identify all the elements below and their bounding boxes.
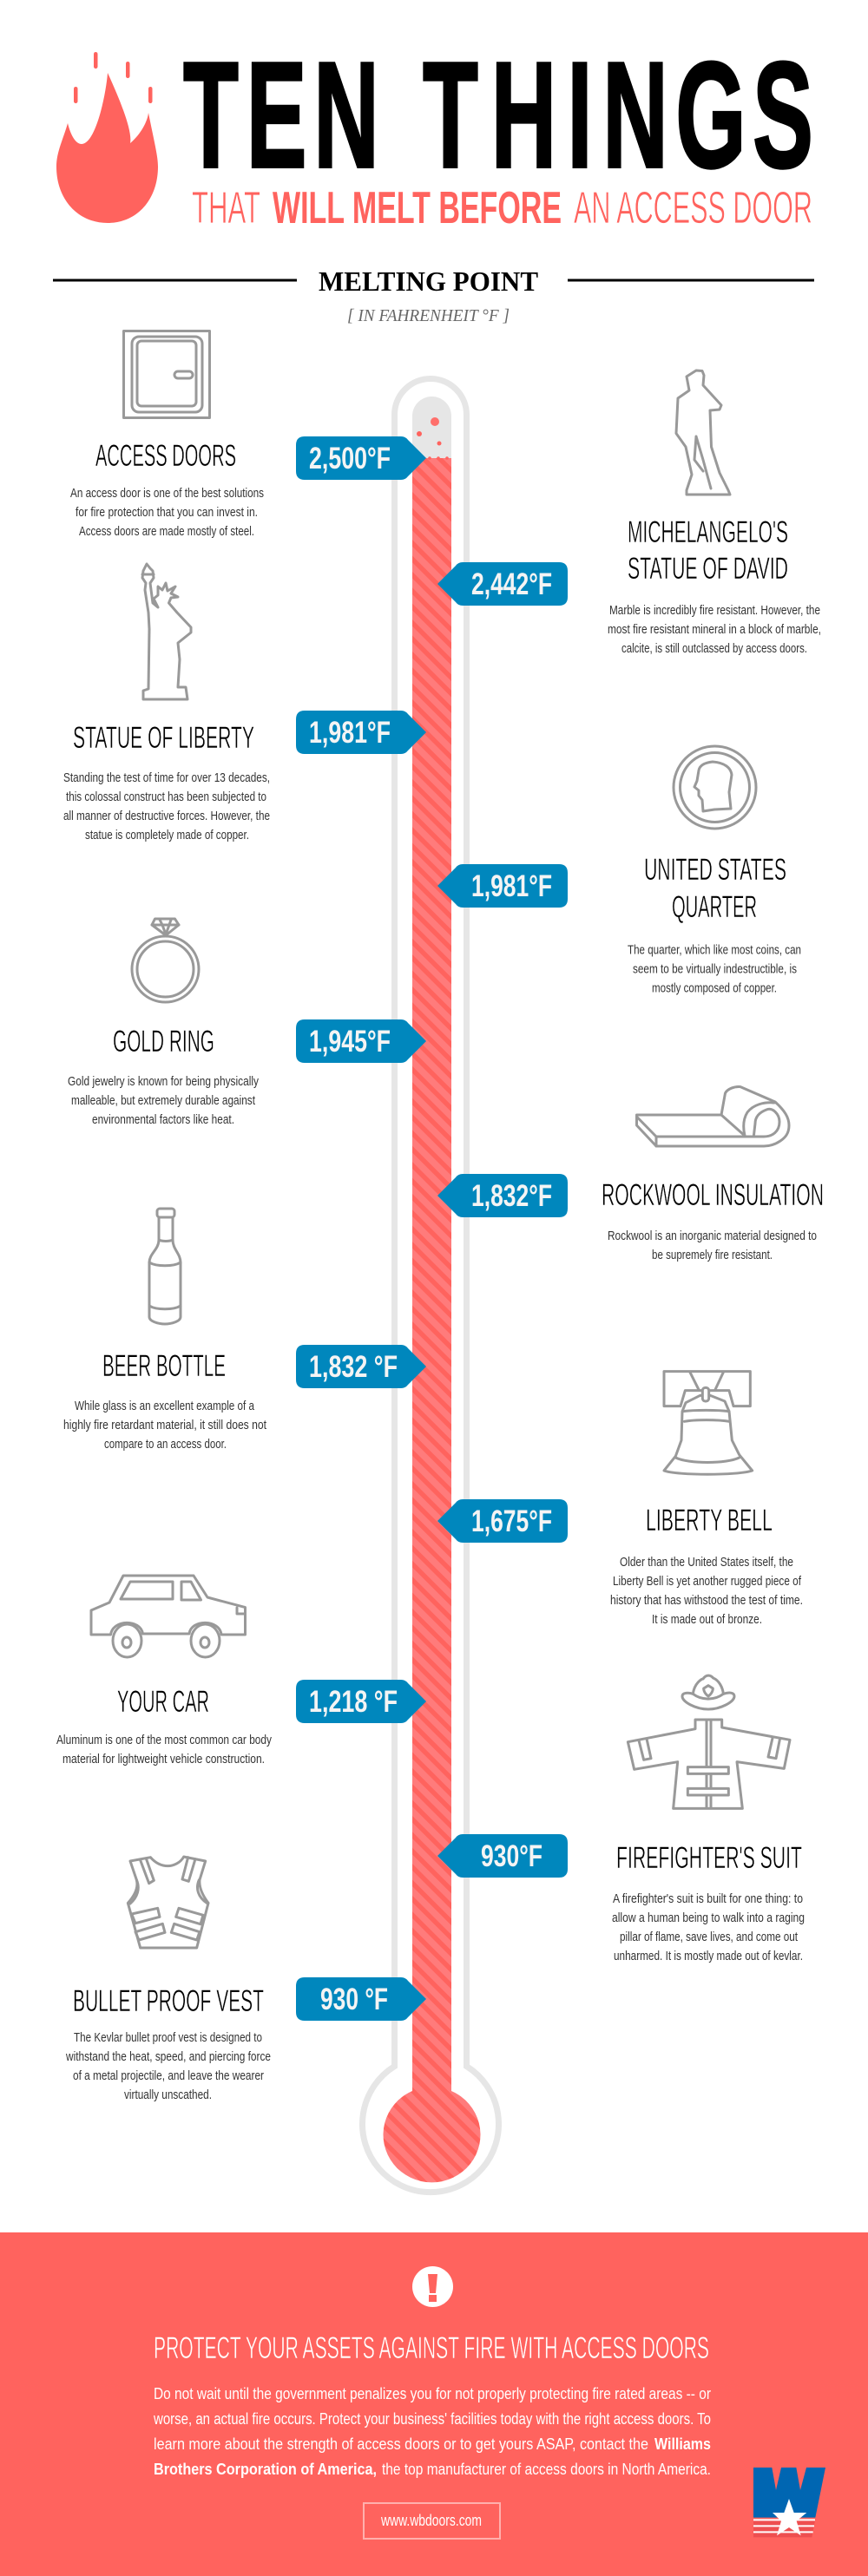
description: Gold jewelry is known for being physically — [68, 1074, 259, 1089]
heading: LIBERTY BELL — [646, 1504, 773, 1537]
description: be supremely fire resistant. — [652, 1248, 773, 1262]
description: highly fire retardant material, it still does not — [63, 1418, 267, 1432]
description — [70, 486, 264, 539]
description: allow a human being to walk into a raging — [612, 1911, 805, 1925]
description: Aluminum is one of the most common car body — [56, 1733, 272, 1747]
description: all manner of destructive forces. However, the — [63, 809, 270, 823]
button: website — [364, 2503, 500, 2539]
panel: united states quarter — [628, 746, 801, 996]
tag: 930 °F left: 930 °F — [320, 1983, 388, 2016]
icon: bottle — [149, 1209, 181, 1324]
tag: 1,218 °F: 1,218 °F — [309, 1685, 398, 1719]
description: compare to an access door. — [104, 1437, 227, 1452]
icon: door — [123, 331, 210, 418]
icon: ring — [132, 919, 199, 1002]
description: Older than the United States itself, the — [620, 1555, 793, 1570]
panel: rockwool insulation — [602, 1087, 824, 1262]
description: Liberty Bell is yet another rugged piece of — [613, 1574, 802, 1589]
description — [608, 603, 821, 656]
tag: 1,218 °F — [296, 1680, 426, 1723]
subtitle: WILL MELT BEFORE — [273, 183, 562, 233]
tag: 2,500°F: 2,500°F — [309, 442, 391, 475]
heading: QUARTER — [672, 890, 757, 924]
footer text — [153, 2385, 711, 2478]
icon: rockwool roll — [637, 1087, 789, 1146]
footer text: Do not wait until the government penalizes you for not properly protecting fire rated areas -- or — [154, 2385, 711, 2402]
description: An access door is one of the best solutions — [70, 486, 264, 501]
section heading: melting point — [53, 265, 814, 325]
heading: BULLET PROOF VEST — [73, 1984, 264, 2018]
icon: bell — [664, 1372, 753, 1474]
icon: quarter — [674, 746, 756, 829]
panel: gold ring — [68, 919, 259, 1127]
description: of a metal projectile, and leave the wearer — [73, 2068, 264, 2083]
thermometer — [363, 378, 499, 2193]
panel: bullet proof vest — [65, 1857, 271, 2102]
tag: 1,981°F left — [296, 711, 426, 754]
description — [612, 1891, 805, 1963]
tag: 1,981°F right — [437, 864, 568, 908]
description: calcite, is still outclassed by access doors. — [621, 641, 807, 656]
subtitle: THAT — [192, 183, 260, 233]
tag: 1,981°F left: 1,981°F — [309, 716, 391, 750]
footer text: learn more about the strength of access doors or to get yours ASAP, contact the — [154, 2435, 648, 2453]
tag: 2,442°F — [437, 562, 568, 606]
heading — [628, 515, 788, 586]
tag: 2,500°F — [296, 436, 426, 480]
section heading: melting point: [ IN FAHRENHEIT °F ] — [347, 306, 510, 325]
description: malleable, but extremely durable against — [71, 1093, 256, 1108]
description: Standing the test of time for over 13 decades, — [63, 770, 270, 785]
panel: beer bottle — [63, 1209, 267, 1452]
description: Rockwool is an inorganic material designed to — [608, 1229, 817, 1243]
tag: 930°F right — [437, 1834, 568, 1878]
description: It is made out of bronze. — [652, 1612, 762, 1627]
logo: williams brothers — [753, 2468, 825, 2537]
description: mostly composed of copper. — [652, 980, 777, 996]
footer text: the top manufacturer of access doors in North America. — [382, 2461, 711, 2478]
tag: 1,675°F — [437, 1499, 568, 1543]
description: Access doors are made mostly of steel. — [79, 524, 254, 539]
footer text: worse, an actual fire occurs. Protect your business' facilities today with the right access doors. To — [153, 2410, 711, 2428]
tag: 930 °F left — [296, 1977, 426, 2021]
footer text: Williams — [654, 2435, 711, 2453]
panel: statue of david — [608, 370, 821, 656]
heading: YOUR CAR — [117, 1685, 209, 1719]
description: unharmed. It is mostly made out of kevlar. — [614, 1949, 803, 1963]
description: for fire protection that you can invest in. — [76, 505, 258, 520]
description — [68, 1074, 259, 1127]
description: The Kevlar bullet proof vest is designed to — [74, 2030, 262, 2045]
tag: 1,945°F — [296, 1019, 426, 1063]
description: While glass is an excellent example of a — [75, 1399, 255, 1413]
tag: 2,442°F: 2,442°F — [471, 567, 552, 601]
button: website: www.wbdoors.com — [380, 2512, 482, 2529]
description: withstand the heat, speed, and piercing force — [65, 2049, 271, 2064]
description: pillar of flame, save lives, and come out — [620, 1930, 799, 1944]
panel: footer call to action — [0, 2232, 868, 2576]
icon: car — [91, 1576, 245, 1657]
description: seem to be virtually indestructible, is — [633, 961, 797, 977]
description — [608, 1229, 817, 1262]
tag: 1,832°F right — [437, 1174, 568, 1217]
icon: firefighter helmet and jacket — [628, 1675, 790, 1808]
tag: 930°F right: 930°F — [481, 1839, 542, 1873]
tag: 1,832°F right: 1,832°F — [471, 1179, 552, 1213]
heading: GOLD RING — [113, 1025, 214, 1059]
description — [610, 1555, 803, 1627]
tag: 1,945°F: 1,945°F — [309, 1025, 391, 1059]
heading: BEER BOTTLE — [102, 1349, 226, 1383]
description: A firefighter's suit is built for one thing: to — [613, 1891, 803, 1906]
tag: 1,981°F right: 1,981°F — [471, 869, 552, 903]
icon: statue of liberty — [142, 564, 191, 699]
panel: access doors — [70, 331, 264, 539]
section heading: melting point: MELTING POINT — [319, 265, 538, 297]
title: TENTHINGS — [183, 31, 813, 200]
heading: STATUE OF LIBERTY — [73, 721, 254, 755]
description — [63, 770, 270, 842]
icon: vest — [128, 1857, 208, 1948]
icon: flame with sparks — [56, 52, 158, 223]
description: material for lightweight vehicle construction. — [62, 1752, 265, 1766]
tag: 1,675°F: 1,675°F — [471, 1504, 552, 1538]
description: The quarter, which like most coins, can — [628, 942, 801, 958]
tag: 1,832 °F left — [296, 1345, 426, 1388]
description — [628, 942, 801, 996]
panel: statue of liberty — [63, 564, 270, 842]
panel: firefighter's suit — [612, 1675, 805, 1963]
description — [63, 1399, 267, 1452]
heading — [644, 853, 786, 924]
description: environmental factors like heat. — [92, 1112, 234, 1127]
panel: your car — [56, 1576, 272, 1766]
icon: david — [676, 370, 730, 495]
icon: exclamation circle — [412, 2266, 453, 2307]
description — [56, 1733, 272, 1766]
panel: liberty bell — [610, 1372, 803, 1627]
tag: 1,832 °F left: 1,832 °F — [309, 1350, 398, 1384]
description: this colossal construct has been subjected to — [66, 790, 266, 804]
description: history that has withstood the test of time. — [610, 1593, 803, 1608]
description: statue is completely made of copper. — [85, 828, 249, 842]
footer text: Brothers Corporation of America, — [154, 2461, 377, 2478]
heading: ACCESS DOORS — [95, 439, 236, 473]
description — [65, 2030, 271, 2102]
description: virtually unscathed. — [124, 2088, 212, 2102]
